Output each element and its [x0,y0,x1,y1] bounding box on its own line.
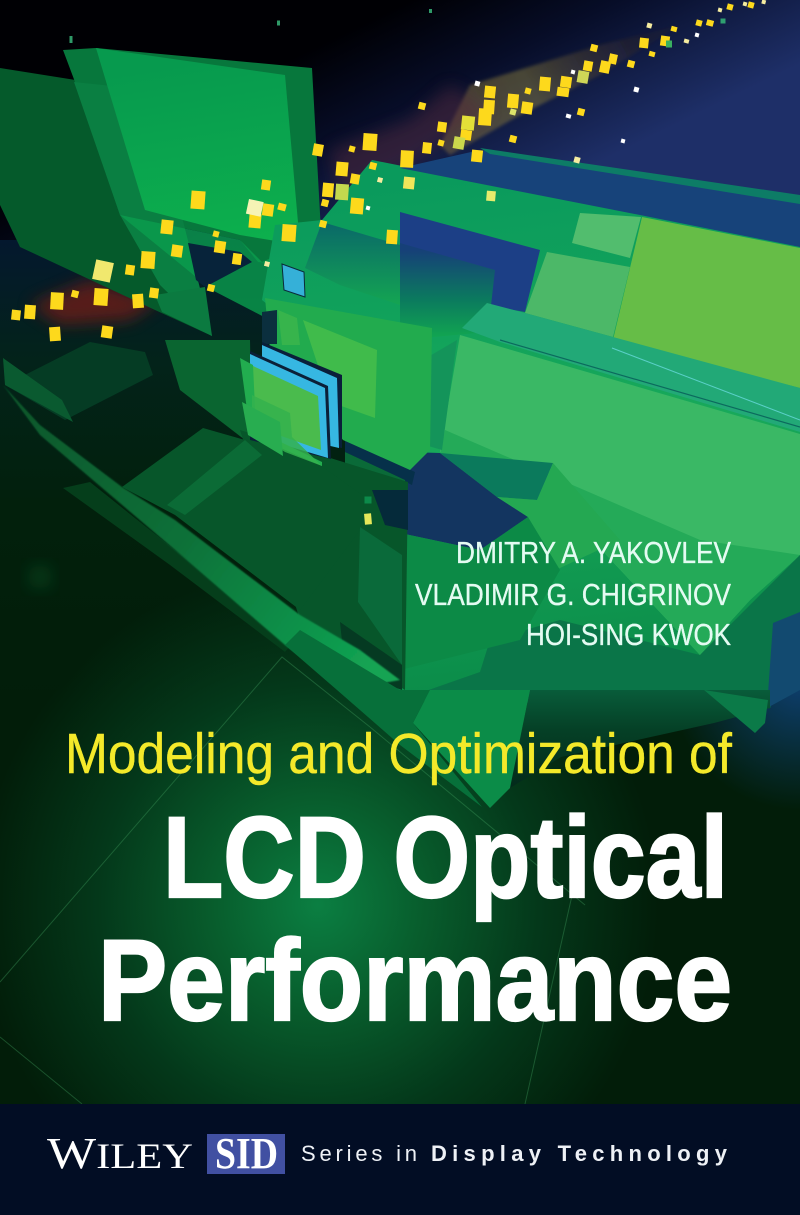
title: Performance [98,917,732,1045]
light streak behind particles [30,25,680,325]
teal fade panel [305,222,400,305]
series line: Display Technology [431,1141,728,1166]
subtitle: Modeling and Optimization of [65,722,732,786]
title [98,794,732,1045]
olive panel [613,217,800,388]
pale green rear panels [525,213,641,337]
series line: Series in [301,1141,417,1166]
large bright green panel [440,335,800,655]
navy window in the green mass [400,212,540,340]
author names: DMITRY A. YAKOVLEV [456,535,731,570]
publisher logo: Wiley: WILEY [47,1129,193,1178]
dark navy band across the top right [400,148,800,247]
icon: stacked LCD layers [240,342,342,466]
author names: HOI-SING KWOK [526,617,731,652]
lower right dark panels [345,340,800,708]
small green sheets [240,358,322,466]
right green mass [262,160,800,708]
left translucent panels [0,48,323,350]
teal strip below olive panel [462,303,800,432]
logo: SID: SID [215,1129,278,1178]
central translucent green panels [262,298,432,470]
particles: pale squares [92,0,766,525]
ground shapes [3,340,770,808]
thin guide lines [0,657,585,1104]
front cyan layer [250,351,331,459]
particles: yellow squares [11,1,755,341]
series line [301,1141,728,1166]
particles: green and cyan squares [70,9,726,504]
author names: VLADIMIR G. CHIGRINOV [415,577,731,612]
back cyan layer [262,342,342,448]
footer band [0,1104,800,1215]
author names [415,535,731,652]
